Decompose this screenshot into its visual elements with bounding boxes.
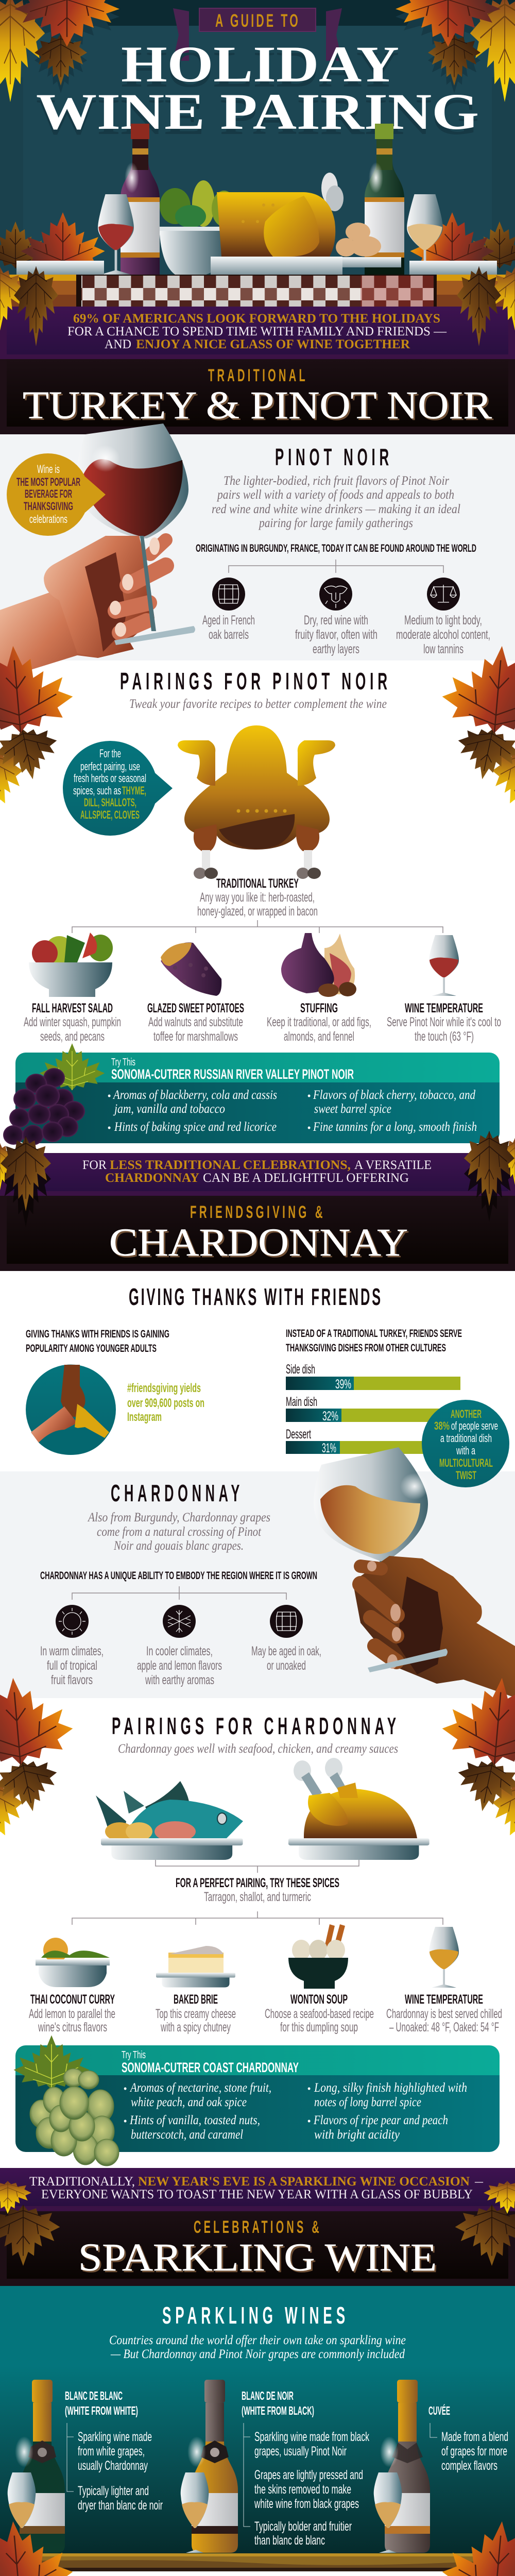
purple band: chardonnay transition bbox=[0, 1153, 515, 1196]
tongue caption: earthy layers bbox=[313, 642, 359, 656]
text: blanc de noir: BLANC DE NOIR bbox=[242, 2389, 294, 2402]
callout: herbs and spices: ALLSPICE, CLOVES bbox=[80, 808, 140, 821]
stat: instagram posts bbox=[127, 1381, 204, 1424]
callout: herbs and spices: THYME, bbox=[122, 784, 146, 797]
purple band: sparkling transition: EVERYONE WANTS TO TOAST THE NEW YEAR WITH A GLASS OF BUBBLY bbox=[41, 2188, 473, 2201]
purple intro band: FOR A CHANCE TO SPEND TIME WITH FAMILY AND FRIENDS — bbox=[67, 325, 447, 338]
text: blanc de blanc: usually Chardonnay bbox=[78, 2459, 148, 2473]
callout: herbs and spices: For the bbox=[99, 747, 121, 760]
illustration: fish plate bbox=[96, 1781, 243, 1860]
tasting notes: sweet barrel spice bbox=[314, 1102, 391, 1116]
grape leaf bbox=[14, 2035, 89, 2090]
sweet potato caption: GLAZED SWEET POTATOES bbox=[147, 1001, 244, 1015]
panel: try this chardonnay: Try This bbox=[122, 2049, 146, 2061]
bottle: cuvee bbox=[380, 2380, 430, 2553]
hand holding white wine glass bbox=[353, 1556, 515, 1698]
stuffing caption: Keep it traditional, or add figs, bbox=[267, 1015, 371, 1029]
tasting notes: Flavors of black cherry, tobacco, and bbox=[313, 1088, 475, 1102]
subtitle: Chardonnay goes well with seafood, chicken, and creamy sauces bbox=[118, 1742, 398, 1756]
tasting notes: white peach, and oak spice bbox=[131, 2095, 247, 2109]
purple band: sparkling transition: NEW YEAR'S EVE IS A SPARKLING WINE OCCASION bbox=[138, 2175, 470, 2189]
text: blanc de noir: (WHITE FROM BLACK) bbox=[242, 2404, 314, 2417]
curry caption: Add lemon to parallel the bbox=[29, 2007, 115, 2021]
purple intro band: ENJOY A NICE GLASS OF WINE TOGETHER bbox=[136, 337, 410, 351]
icon: coconut curry bbox=[36, 1938, 110, 1987]
tongue caption: Dry, red wine with bbox=[304, 613, 368, 628]
left subheading: GIVING THANKS WITH FRIENDS IS GAINING bbox=[26, 1328, 169, 1340]
tongue caption: fruity flavor, often with bbox=[295, 628, 377, 642]
plates under glasses bbox=[16, 261, 497, 275]
icon: baked brie bbox=[156, 1946, 235, 1988]
text: blanc de blanc: dryer than blanc de noir bbox=[78, 2498, 163, 2513]
tasting notes: • bbox=[307, 1123, 311, 1133]
section header: friendsgiving and chardonnay bbox=[0, 1196, 515, 1271]
section header: celebrations and sparkling wine: SPARKLING WINE bbox=[78, 2236, 437, 2279]
icon: snowflake bbox=[163, 1605, 196, 1638]
icon: tongue bbox=[319, 578, 352, 611]
description: Noir and gouais blanc grapes. bbox=[113, 1539, 244, 1553]
leaves: top left bbox=[0, 0, 119, 102]
section header: turkey and pinot noir bbox=[0, 359, 515, 434]
spices caption: Tarragon, shallot, and turmeric bbox=[204, 1890, 311, 1904]
spices caption bbox=[176, 1876, 339, 1904]
text: blanc de blanc bbox=[65, 2389, 163, 2513]
purple band: chardonnay transition: CAN BE A DELIGHTFUL OFFERING bbox=[203, 1171, 409, 1185]
brie caption bbox=[156, 1992, 236, 2035]
turkey caption: honey-glazed, or wrapped in bacon bbox=[197, 904, 318, 919]
wooden shelf bbox=[0, 2553, 515, 2571]
leaves: band right bbox=[464, 1131, 515, 1206]
brie caption: Top this creamy cheese bbox=[156, 2007, 236, 2021]
curry caption bbox=[29, 1992, 115, 2035]
stat: instagram posts: Instagram bbox=[127, 1410, 162, 1424]
tasting notes: notes of long barrel spice bbox=[314, 2095, 421, 2109]
bar chart: 39% bbox=[335, 1377, 351, 1392]
icon: chardonnay glass temperature bbox=[429, 1927, 459, 1988]
bar chart: 31% bbox=[322, 1441, 336, 1455]
description: Countries around the world offer their own take on sparkling wine bbox=[109, 2333, 406, 2347]
section header: turkey and pinot noir: TRADITIONAL bbox=[208, 366, 308, 385]
salad caption: seeds, and pecans bbox=[40, 1029, 105, 1044]
warm climates caption: In warm climates, bbox=[40, 1644, 104, 1658]
leaf cluster left: sparkling pairings bbox=[0, 2516, 76, 2576]
leaves: top right bbox=[396, 0, 515, 102]
tasting notes: • bbox=[307, 1091, 311, 1101]
callout: multicultural twist: 38% bbox=[434, 1419, 450, 1432]
description: The lighter-bodied, rich fruit flavors of Pinot Noir bbox=[224, 474, 449, 488]
text: blanc de blanc: BLANC DE BLANC bbox=[65, 2389, 123, 2402]
roast turkey bbox=[211, 173, 344, 275]
panel: pinot noir bbox=[0, 423, 515, 685]
tasting notes: jam, vanilla and tobacco bbox=[113, 1102, 225, 1116]
tasting notes: Fine tannins for a long, smooth finish bbox=[313, 1120, 477, 1134]
icon: figs bbox=[281, 933, 356, 997]
red wine glass bbox=[98, 194, 134, 275]
tasting notes: • bbox=[307, 2116, 311, 2126]
leaves: hanging over band left bbox=[0, 266, 58, 346]
icon: salad bbox=[29, 933, 113, 997]
curry caption: wine's citrus flavors bbox=[38, 2020, 107, 2035]
salad caption bbox=[24, 1001, 121, 1044]
callout: most popular beverage: Wine is bbox=[37, 463, 60, 476]
barrel caption: Aged in French bbox=[202, 613, 255, 628]
glass: blanc de blanc bbox=[8, 2472, 36, 2553]
section header: turkey and pinot noir: TURKEY & PINOT NOIR bbox=[23, 384, 492, 427]
purple intro band: 69% OF AMERICANS LOOK FORWARD TO THE HOLIDAYS bbox=[73, 312, 440, 326]
stat: instagram posts: #friendsgiving yields bbox=[127, 1381, 201, 1395]
turkey caption bbox=[197, 876, 318, 919]
bar chart: Main dish bbox=[286, 1395, 317, 1409]
callout: herbs and spices: perfect pairing, use bbox=[80, 760, 140, 773]
leaves: band left bbox=[0, 2181, 60, 2266]
callout: most popular beverage: celebrations bbox=[29, 513, 67, 526]
stat: instagram posts: over 909,600 posts on bbox=[127, 1396, 204, 1410]
curry caption: THAI COCONUT CURRY bbox=[30, 1992, 115, 2007]
text: blanc de blanc: Typically lighter and bbox=[78, 2484, 149, 2498]
bar chart bbox=[286, 1362, 460, 1455]
subheading: CHARDONNAY HAS A UNIQUE ABILITY TO EMBODY THE REGION WHERE IT IS GROWN bbox=[40, 1569, 317, 1582]
callout: most popular beverage bbox=[7, 453, 106, 536]
text: blanc de noir: than blanc de blanc bbox=[254, 2533, 325, 2548]
heading: SPARKLING WINES bbox=[162, 2302, 349, 2329]
section header: friendsgiving and chardonnay: CHARDONNAY bbox=[109, 1221, 408, 1264]
wonton caption: for this dumpling soup bbox=[280, 2020, 358, 2035]
text: blanc de noir: Sparkling wine made from black bbox=[254, 2430, 369, 2444]
salad bowl bbox=[160, 180, 236, 275]
purple intro band: AND bbox=[105, 337, 131, 351]
text: blanc de noir: white wine from black grapes bbox=[254, 2497, 359, 2511]
warm climates caption bbox=[40, 1644, 104, 1687]
leaves: lower right bbox=[410, 212, 515, 273]
potatoes bbox=[336, 223, 401, 267]
section header: celebrations and sparkling wine bbox=[0, 2211, 515, 2286]
text: blanc de blanc: (WHITE FROM WHITE) bbox=[65, 2404, 138, 2417]
wonton caption: WONTON SOUP bbox=[290, 1992, 348, 2007]
white wine glass bbox=[407, 194, 443, 275]
leaves: band left bbox=[0, 1136, 51, 1211]
tasting notes: Long, silky finish highlighted with bbox=[314, 2081, 467, 2095]
salad caption: Add winter squash, pumpkin bbox=[24, 1015, 121, 1029]
right subheading bbox=[286, 1327, 462, 1354]
sweet potato caption bbox=[147, 1001, 244, 1044]
brie caption: with a spicy chutney bbox=[160, 2020, 231, 2035]
text: cuvee bbox=[428, 2403, 508, 2473]
callout: multicultural twist: with a bbox=[456, 1444, 475, 1457]
tasting notes: • bbox=[108, 1123, 111, 1133]
purple band: chardonnay transition: A VERSATILE bbox=[354, 1158, 432, 1172]
stuffing caption: almonds, and fennel bbox=[284, 1029, 354, 1044]
purple band: sparkling transition bbox=[0, 2168, 515, 2211]
turkey caption: Any way you like it: herb-roasted, bbox=[200, 890, 315, 905]
heading: chardonnay: CHARDONNAY bbox=[111, 1480, 244, 1506]
bar chart: Dessert bbox=[286, 1427, 311, 1442]
callout: multicultural twist bbox=[422, 1400, 509, 1487]
icon: sun bbox=[56, 1605, 89, 1638]
bar chart: Side dish bbox=[286, 1362, 315, 1377]
panel: try this chardonnay bbox=[14, 2035, 500, 2166]
leaves: hanging over band right bbox=[457, 266, 515, 346]
leaves: lower left bbox=[0, 212, 105, 273]
wine temperature caption: the touch (63 °F) bbox=[415, 1029, 474, 1044]
left subheading bbox=[26, 1328, 169, 1354]
leaf cluster right: pinot pairings bbox=[439, 641, 515, 818]
tasting notes: Flavors of ripe pear and peach bbox=[313, 2113, 448, 2127]
leaf cluster right: chardonnay pairings bbox=[439, 1673, 515, 1850]
panel: try this pinot noir bbox=[3, 1043, 500, 1145]
tasting notes: • bbox=[124, 2116, 127, 2126]
leaf cluster left: pinot pairings bbox=[0, 641, 76, 818]
sweet potato caption: Add walnuts and substitute bbox=[148, 1015, 243, 1029]
salad caption: FALL HARVEST SALAD bbox=[32, 1001, 113, 1015]
title bbox=[36, 36, 479, 140]
spices caption: FOR A PERFECT PAIRING, TRY THESE SPICES bbox=[176, 1876, 339, 1890]
callout: multicultural twist: ANOTHER bbox=[451, 1408, 482, 1420]
text: blanc de noir: grapes, usually Pinot Noir bbox=[254, 2444, 347, 2459]
tasting notes: Aromas of blackberry, cola and cassis bbox=[112, 1088, 277, 1102]
pinot glass bbox=[76, 423, 188, 538]
tasting notes: Hints of vanilla, toasted nuts, bbox=[129, 2113, 260, 2127]
oak caption: May be aged in oak, bbox=[251, 1644, 321, 1658]
cool climates caption: with earthy aromas bbox=[145, 1673, 214, 1687]
tasting notes: with bright acidity bbox=[314, 2128, 400, 2142]
panel: sparkling wines bbox=[0, 2286, 515, 2571]
tasting notes: Aromas of nectarine, stone fruit, bbox=[129, 2081, 271, 2095]
purple band: chardonnay transition: LESS TRADITIONAL CELEBRATIONS, bbox=[110, 1158, 351, 1172]
wonton caption: Choose a seafood-based recipe bbox=[265, 2007, 374, 2021]
callout: most popular beverage: THE MOST POPULAR bbox=[16, 476, 80, 488]
callout: herbs and spices bbox=[63, 741, 173, 836]
callout: most popular beverage: THANKSGIVING bbox=[24, 500, 73, 513]
glass: cuvee bbox=[374, 2472, 402, 2553]
leaves: band right bbox=[455, 2181, 515, 2266]
tasting notes: • bbox=[307, 2083, 311, 2094]
tasting notes: butterscotch, and caramel bbox=[131, 2128, 243, 2142]
description: Also from Burgundy, Chardonnay grapes bbox=[87, 1511, 270, 1524]
description: pairs well with a variety of foods and appeals to both bbox=[216, 488, 454, 502]
icon: barrel bbox=[212, 578, 245, 611]
illustration: roast chicken plate bbox=[288, 1758, 430, 1860]
warm climates caption: full of tropical bbox=[47, 1658, 97, 1673]
heading: pinot noir: PINOT NOIR bbox=[275, 444, 393, 470]
leaf shadows bbox=[14, 0, 501, 93]
tongue caption bbox=[295, 613, 377, 656]
purple intro band bbox=[0, 307, 515, 359]
description: red wine and white wine drinkers — making it an ideal bbox=[212, 502, 460, 516]
subtitle: Tweak your favorite recipes to better complement the wine bbox=[129, 697, 387, 711]
sweet potato caption: toffee for marshmallows bbox=[153, 1029, 238, 1044]
cool climates caption: apple and lemon flavors bbox=[137, 1658, 222, 1673]
description bbox=[212, 474, 460, 530]
illustration: roast turkey bbox=[178, 725, 335, 879]
scales caption bbox=[396, 613, 490, 656]
text: blanc de blanc: from white grapes, bbox=[78, 2444, 145, 2459]
temperature caption bbox=[386, 1992, 502, 2035]
icon: scales bbox=[427, 578, 460, 611]
tasting notes bbox=[124, 2081, 467, 2142]
title: WINE PAIRING bbox=[36, 83, 479, 140]
text: blanc de noir: Typically bolder and fruitier bbox=[254, 2519, 352, 2534]
purple band: sparkling transition: TRADITIONALLY, bbox=[29, 2175, 135, 2189]
oak caption: or unoaked bbox=[267, 1658, 306, 1673]
tasting notes: Hints of baking spice and red licorice bbox=[114, 1120, 277, 1134]
left subheading: POPULARITY AMONG YOUNGER ADULTS bbox=[26, 1342, 157, 1354]
hero section bbox=[0, 0, 515, 386]
leaf cluster left: chardonnay pairings bbox=[0, 1673, 76, 1850]
description bbox=[109, 2333, 406, 2361]
description: pairing for large family gatherings bbox=[258, 516, 413, 530]
panel: try this pinot noir: SONOMA-CUTRER RUSSIAN RIVER VALLEY PINOT NOIR bbox=[111, 1066, 354, 1082]
callout: most popular beverage: BEVERAGE FOR bbox=[25, 487, 72, 500]
warm climates caption: fruit flavors bbox=[51, 1673, 93, 1687]
title: HOLIDAY bbox=[121, 36, 399, 93]
purple grapes bbox=[3, 1068, 85, 1145]
text: blanc de noir: Grapes are lightly pressed and bbox=[254, 2468, 363, 2482]
green grapes bbox=[30, 2069, 119, 2166]
text: blanc de noir: the skins removed to make bbox=[254, 2482, 351, 2497]
table and tablecloth bbox=[0, 275, 515, 307]
panel: try this pinot noir: Try This bbox=[111, 1057, 135, 1068]
scales caption: low tannins bbox=[423, 642, 464, 656]
purple band: chardonnay transition: CHARDONNAY bbox=[105, 1171, 199, 1185]
brie caption: BAKED BRIE bbox=[174, 1992, 218, 2007]
text: blanc de noir bbox=[242, 2389, 369, 2548]
wine temperature caption bbox=[387, 1001, 501, 1044]
barrel caption bbox=[202, 613, 255, 642]
stuffing caption: STUFFING bbox=[300, 1001, 338, 1015]
cool climates caption bbox=[137, 1644, 222, 1687]
stuffing caption bbox=[267, 1001, 371, 1044]
callout: herbs and spices: fresh herbs or seasonal bbox=[74, 772, 146, 785]
description: come from a natural crossing of Pinot bbox=[97, 1525, 262, 1539]
text: blanc de blanc: Sparkling wine made bbox=[78, 2430, 152, 2444]
icon: sweet potato bbox=[161, 942, 221, 996]
circle illustration: joining hands bbox=[26, 1364, 116, 1455]
section header: friendsgiving and chardonnay: FRIENDSGIVING & bbox=[190, 1202, 325, 1222]
oak caption bbox=[251, 1644, 321, 1673]
ribbon: a guide to bbox=[173, 8, 342, 61]
callout: herbs and spices: DILL, SHALLOTS, bbox=[84, 796, 136, 809]
bar chart: 32% bbox=[322, 1409, 338, 1423]
section header: celebrations and sparkling wine: CELEBRATIONS & bbox=[194, 2217, 322, 2237]
tasting notes: • bbox=[108, 1091, 111, 1101]
barrel caption: oak barrels bbox=[209, 628, 249, 642]
bottle: blanc de noir bbox=[187, 2380, 238, 2553]
icon: wonton soup bbox=[288, 1924, 348, 1989]
tasting notes: • bbox=[124, 2083, 127, 2094]
leaf shadows on dark band bbox=[1, 1146, 514, 1227]
tasting notes bbox=[108, 1088, 477, 1134]
green wine bottle bbox=[365, 124, 404, 275]
red wine bottle bbox=[121, 124, 160, 275]
description bbox=[87, 1511, 270, 1553]
grape leaf bbox=[40, 1043, 105, 1090]
callout: multicultural twist: TWIST bbox=[456, 1469, 476, 1482]
wonton caption bbox=[265, 1992, 374, 2035]
panel: try this chardonnay: SONOMA-CUTRER COAST CHARDONNAY bbox=[122, 2060, 299, 2075]
callout: herbs and spices: spices, such as bbox=[73, 784, 121, 797]
turkey caption: TRADITIONAL TURKEY bbox=[216, 876, 299, 891]
glass: blanc de noir bbox=[181, 2472, 209, 2553]
purple band: sparkling transition: — bbox=[474, 2175, 484, 2189]
hand holding glass bbox=[0, 536, 195, 685]
cool climates caption: In cooler climates, bbox=[146, 1644, 213, 1658]
purple band: chardonnay transition: FOR bbox=[82, 1158, 107, 1172]
white wine glass bbox=[314, 1447, 429, 1656]
leaf cluster right: sparkling pairings bbox=[439, 2516, 515, 2576]
ribbon: a guide to: A GUIDE TO bbox=[215, 11, 300, 31]
panel: chardonnay bbox=[0, 1447, 515, 1698]
icon: oak barrel bbox=[270, 1605, 303, 1638]
text: cuvee: CUVÉE bbox=[428, 2403, 450, 2417]
description: — But Chardonnay and Pinot Noir grapes are commonly included bbox=[110, 2347, 405, 2361]
icon: wine glass temperature bbox=[429, 935, 459, 996]
bottle: blanc de blanc bbox=[15, 2380, 65, 2553]
